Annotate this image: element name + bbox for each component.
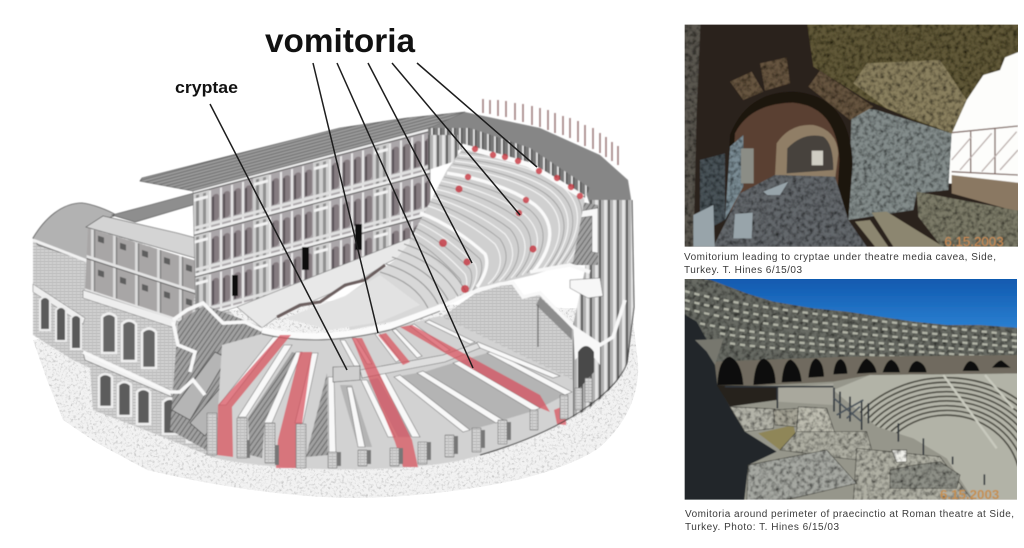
left tower cornice xyxy=(86,216,203,258)
right outer wall xyxy=(572,200,634,417)
dark under arcade xyxy=(717,385,777,407)
stone blocks xyxy=(730,407,973,502)
blue sky xyxy=(702,279,1017,328)
leader line from cryptae xyxy=(210,104,347,370)
orchestra floor xyxy=(285,275,420,330)
red vomitoria passages xyxy=(217,325,566,468)
second ledge xyxy=(83,290,177,328)
lower side roof xyxy=(112,192,199,222)
caption for upper photo xyxy=(684,252,996,276)
heading: vomitoria: vomitoria xyxy=(265,22,416,59)
dark stage doorways xyxy=(232,224,421,296)
white arch in section xyxy=(573,327,600,365)
lower ledge xyxy=(83,352,172,397)
dark arches xyxy=(717,357,1011,385)
label: cryptae: cryptae xyxy=(175,78,238,97)
caption for upper photo: Vomitorium leading to cryptae under theatre media cavea, Side, xyxy=(684,252,996,263)
left cross-section interior xyxy=(170,305,275,455)
caption for upper photo: Turkey. T. Hines 6/15/03 xyxy=(684,265,802,276)
dark hatched wall sides xyxy=(248,352,328,458)
floor slabs xyxy=(855,212,943,247)
aisles in lower seating xyxy=(943,375,1013,448)
torn stage edge xyxy=(277,265,385,317)
caption for lower photo: Turkey. Photo: T. Hines 6/15/03 xyxy=(685,522,839,533)
left tower facade xyxy=(85,228,200,325)
right cross-section interior xyxy=(440,283,573,395)
small left colonnade beside stage xyxy=(428,135,458,170)
grey faces of radial walls xyxy=(340,353,565,447)
dark arch opening xyxy=(578,346,594,390)
caption for lower photo: Vomitoria around perimeter of praecinctio at Roman theatre at Side, xyxy=(685,509,1014,520)
ground base xyxy=(732,374,1017,500)
cross vault band xyxy=(360,343,480,378)
lower seats facing orchestra xyxy=(340,240,470,330)
stage building roof xyxy=(140,112,465,191)
first arch xyxy=(725,92,853,220)
upper outer drum roof and parapet xyxy=(430,112,632,205)
theatre cutaway illustration xyxy=(33,99,638,498)
fence xyxy=(725,387,984,485)
second arch xyxy=(775,125,838,180)
vault stonework xyxy=(807,20,1023,133)
right stone wall xyxy=(848,107,952,220)
upper seating xyxy=(684,279,1017,362)
sky opening xyxy=(948,50,1023,187)
left light patch xyxy=(695,339,723,365)
central pier block xyxy=(333,366,360,382)
pier shadows xyxy=(247,422,511,466)
radial walls xyxy=(219,320,572,457)
praecinctio walkways xyxy=(420,173,550,287)
vault highlight xyxy=(853,60,967,133)
lower seat arcs xyxy=(859,376,1017,466)
thick white orchestra rim xyxy=(262,307,442,336)
lower seat arcs xyxy=(380,244,466,308)
left outer wall xyxy=(33,225,245,458)
return pier patch xyxy=(741,148,754,183)
caption for lower photo xyxy=(685,509,1014,533)
photo: vomitorium passage at Side xyxy=(680,20,1023,253)
thin vertical drain line xyxy=(537,305,539,347)
parapet ledge xyxy=(952,175,1023,213)
orchestra rim shadow xyxy=(262,311,440,340)
upper seat rows xyxy=(685,291,1018,365)
pavement behind fence xyxy=(777,383,833,405)
left pier lower patch xyxy=(700,153,725,233)
left pier highlight xyxy=(725,135,743,220)
middle arcade xyxy=(102,314,156,368)
left pilaster xyxy=(684,24,701,247)
stage floor xyxy=(237,238,414,328)
dry grass xyxy=(758,425,797,450)
leader lines from vomitoria xyxy=(313,63,537,368)
seat rows xyxy=(410,149,585,298)
photo: Roman theatre at Side xyxy=(680,275,1023,508)
upper white walkway xyxy=(462,146,583,197)
left dark masonry xyxy=(680,312,777,508)
dark band under stair xyxy=(536,297,572,340)
inner barrel vault xyxy=(730,103,839,220)
cobblestone ground xyxy=(33,300,638,498)
deep corridor xyxy=(787,136,833,173)
date stamp: 6.15.2003 xyxy=(940,487,999,502)
photo background xyxy=(680,20,1023,253)
domed left roof xyxy=(33,203,116,262)
lower arcade xyxy=(99,374,200,442)
white section profile lines xyxy=(83,265,625,395)
date stamp: 6.15.2003 xyxy=(944,234,1004,249)
outer pier row xyxy=(207,378,592,468)
hatched wall right of seats xyxy=(570,200,598,265)
radial substructure floor xyxy=(215,316,573,469)
railing xyxy=(952,126,1018,175)
first ledge xyxy=(33,284,85,324)
parapet masts xyxy=(483,99,618,165)
central cavea seats xyxy=(395,148,585,305)
red vomitoria openings in seats xyxy=(439,146,583,293)
arcade of vomitoria xyxy=(713,355,1018,388)
fallen blocks xyxy=(693,182,788,247)
white section wedges on right xyxy=(570,208,603,298)
voussoir blocks xyxy=(730,57,873,120)
stage facade xyxy=(193,128,430,320)
upper gallery colonnade xyxy=(428,128,590,198)
upper left arcade xyxy=(40,297,81,349)
lower seating xyxy=(833,373,1018,500)
vault tubes xyxy=(172,352,250,436)
dome lip xyxy=(33,240,90,262)
corridor light xyxy=(812,151,823,165)
gravel floor xyxy=(713,175,867,247)
drum rim line xyxy=(480,200,634,455)
right bench xyxy=(916,192,1018,247)
